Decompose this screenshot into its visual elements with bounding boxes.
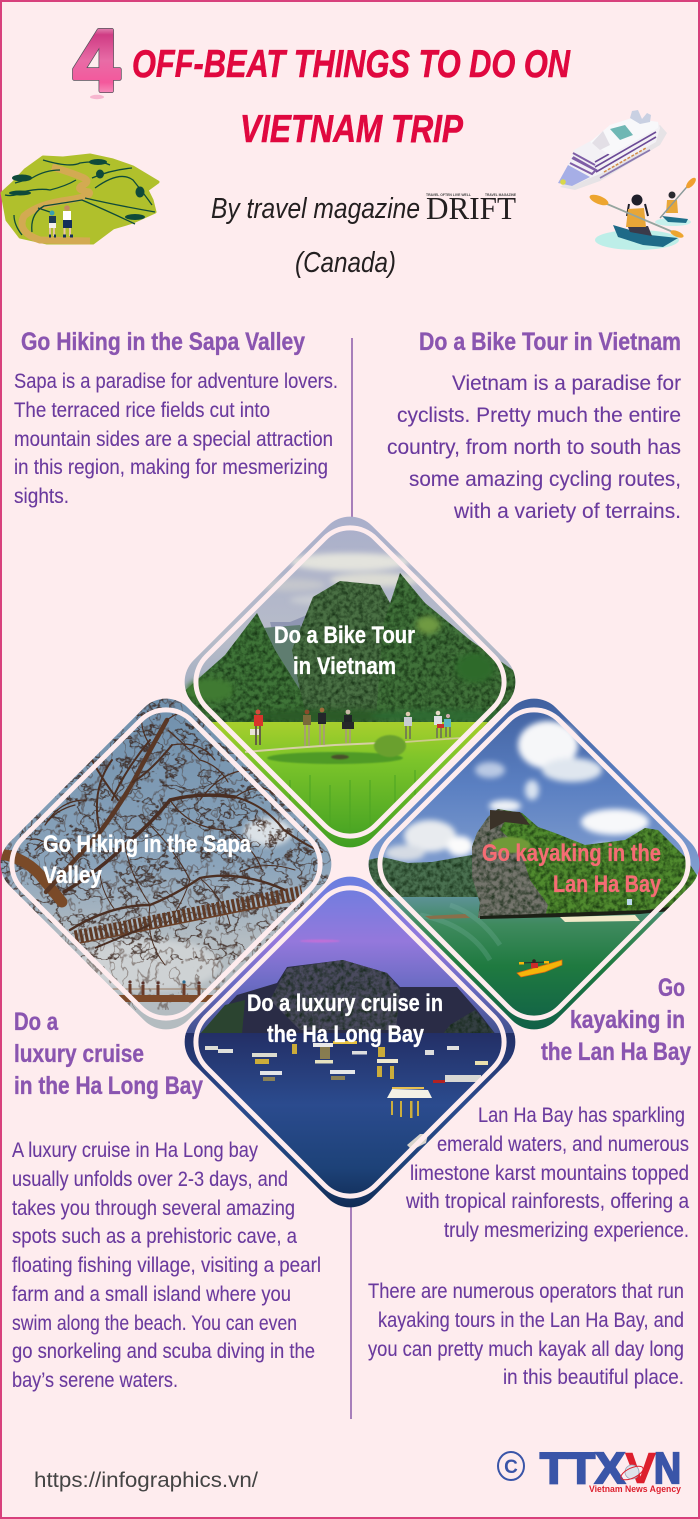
body text: The terraced rice fields cut into (14, 399, 270, 422)
caption: Lan Ha Bay (553, 871, 662, 898)
DRIFT logo: DRIFT (426, 190, 516, 226)
heading: luxury cruise (14, 1040, 144, 1068)
body text: Sapa is a paradise for adventure lovers. (14, 370, 338, 393)
icon: big number 4: 4 (73, 11, 120, 110)
caption: Go Hiking in the Sapa (43, 831, 252, 858)
photo diamond: Ha Long Bay cruise (180, 872, 520, 1213)
heading (14, 1008, 203, 1100)
body text: with a variety of terrains. (453, 500, 681, 523)
caption: Do a luxury cruise in (247, 990, 443, 1017)
body text: farm and a small island where you (12, 1283, 291, 1306)
body text: sights. (14, 485, 69, 508)
limestone karst (472, 809, 700, 919)
tree branches (0, 712, 322, 965)
caption: Do a Bike Tour (274, 622, 415, 649)
footer url: https://infographics.vn/ (34, 1469, 258, 1492)
copyright mark (498, 1452, 524, 1480)
caption: Go kayaking in the (482, 840, 661, 867)
logo: TTXVN Vietnam News Agency: Vietnam News Agency (589, 1484, 681, 1494)
central divider upper (351, 338, 353, 520)
body text: usually unfolds over 2-3 days, and (12, 1168, 288, 1191)
body text: takes you through several amazing (12, 1197, 295, 1220)
body text: mountain sides are a special attraction (14, 428, 333, 451)
logo: TTXVN Vietnam News Agency: TTX (540, 1444, 625, 1493)
DRIFT logo: TRAVEL MAGAZINE (485, 193, 517, 197)
hanging bridge (75, 892, 302, 948)
subtitle (211, 190, 517, 279)
body text: in this beautiful place. (503, 1366, 684, 1389)
caption: Valley (43, 862, 103, 889)
body text (12, 1139, 321, 1392)
central divider lower (350, 1205, 352, 1419)
icon: kayakers (588, 176, 698, 250)
body text: in this region, making for mesmerizing (14, 456, 328, 479)
icon: hikers on green hills (2, 155, 158, 243)
panel: bike tour text (387, 328, 681, 523)
caption (274, 622, 415, 680)
body text: swim along the beach. You can even (12, 1312, 297, 1335)
subtitle: (Canada) (295, 247, 396, 279)
DRIFT logo: TRAVEL OFTEN LIVE WELL (426, 193, 471, 197)
body text: Vietnam is a paradise for (452, 372, 681, 395)
title (73, 11, 571, 151)
body text: cyclists. Pretty much the entire (397, 404, 681, 427)
icon: cruise ship (558, 110, 667, 190)
logo: TTXVN Vietnam News Agency (540, 1444, 681, 1494)
caption (482, 840, 662, 898)
caption: the Ha Long Bay (267, 1021, 425, 1048)
photo diamond: bike tour (180, 510, 520, 852)
body text: some amazing cycling routes, (409, 468, 681, 491)
title line one: OFF-BEAT THINGS TO DO ON (132, 43, 571, 86)
panel: kayaking text (368, 974, 691, 1389)
icon: big number 4: 4 (73, 11, 120, 110)
body text: go snorkeling and scuba diving in the (12, 1340, 315, 1363)
body text: country, from north to south has (387, 436, 681, 459)
body text (387, 372, 681, 523)
hiker figures (49, 205, 73, 236)
subtitle: By travel magazine (211, 193, 420, 225)
body text: A luxury cruise in Ha Long bay (12, 1139, 258, 1162)
logo: TTXVN Vietnam News Agency: N (654, 1444, 681, 1493)
body text: spots such as a prehistoric cave, a (12, 1225, 297, 1248)
caption: in Vietnam (293, 653, 396, 680)
body text: floating fishing village, visiting a pearl (12, 1254, 321, 1277)
kayak (517, 959, 562, 977)
photo diamond: Sapa hiking (0, 695, 340, 1035)
heading: Go (658, 974, 685, 1002)
caption (247, 990, 443, 1048)
lower bridge and hikers (112, 980, 222, 1002)
body text: bay’s serene waters. (12, 1369, 178, 1392)
photo diamond: Lan Ha Bay kayaking (365, 695, 700, 1035)
logo: TTXVN Vietnam News Agency: V (625, 1444, 657, 1493)
body text (14, 370, 338, 508)
heading: Go Hiking in the Sapa Valley (21, 328, 305, 356)
panel: hiking text (14, 328, 338, 508)
copyright mark: C (504, 1457, 518, 1478)
body text (368, 1104, 689, 1389)
cruise boats (205, 1041, 488, 1150)
heading: Do a (14, 1008, 59, 1036)
heading: in the Ha Long Bay (14, 1072, 203, 1100)
caption (43, 831, 252, 889)
cyclists (250, 708, 451, 746)
panel: cruise text (12, 1008, 321, 1392)
title line two: VIETNAM TRIP (240, 108, 464, 151)
heading (541, 974, 691, 1066)
